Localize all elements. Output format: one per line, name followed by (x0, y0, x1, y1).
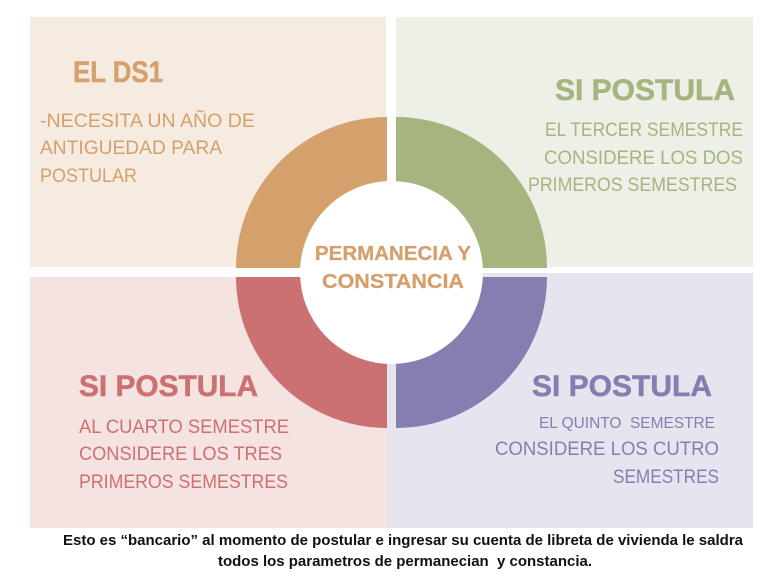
text: bottom left: CONSIDERE LOS TRES (79, 443, 282, 465)
center circle (300, 181, 483, 364)
text: bottom left: AL CUARTO SEMESTRE (79, 416, 289, 438)
heading: bottom right: SI POSTULA (532, 370, 712, 403)
text: bottom left (79, 416, 289, 493)
text: bottom right (495, 438, 719, 488)
footer note (63, 532, 744, 570)
segment: red (236, 277, 387, 428)
panel: top right (396, 17, 753, 267)
text: top left: -NECESITA UN AÑO DE (40, 108, 255, 132)
segment: green (396, 117, 547, 268)
heading: top right: SI POSTULA (555, 74, 735, 107)
footer note: Esto es “bancario” al momento de postular e ingresar su cuenta de libreta de vivienda le saldra (63, 532, 744, 549)
text: top left: POSTULAR (40, 165, 137, 187)
segment: orange (236, 117, 387, 268)
center label (315, 242, 471, 293)
segment: purple (396, 277, 547, 428)
footer note: todos los parametros de permanecian y constancia. (218, 553, 592, 570)
heading: bottom left: SI POSTULA (79, 370, 258, 403)
heading: top left: EL DS1 (73, 56, 163, 89)
text: bottom right small: EL QUINTO SEMESTRE (539, 415, 715, 432)
text: bottom left: PRIMEROS SEMESTRES (79, 471, 288, 493)
text: bottom right: CONSIDERE LOS CUTRO (495, 438, 719, 460)
text: top right: PRIMEROS SEMESTRES (528, 174, 737, 196)
text: top right (528, 119, 743, 196)
panel: bottom right (387, 273, 753, 528)
text: top left: ANTIGUEDAD PARA (40, 137, 222, 159)
center label: CONSTANCIA (322, 270, 464, 293)
text: top right: CONSIDERE LOS DOS (544, 147, 743, 169)
center label: PERMANECIA Y (315, 242, 471, 265)
panel: top left (30, 17, 386, 267)
panel: bottom left (30, 277, 387, 528)
text: top left (40, 108, 255, 187)
text: bottom right: SEMESTRES (613, 466, 719, 488)
donut chart (236, 117, 547, 428)
text: top right: EL TERCER SEMESTRE (545, 119, 743, 141)
